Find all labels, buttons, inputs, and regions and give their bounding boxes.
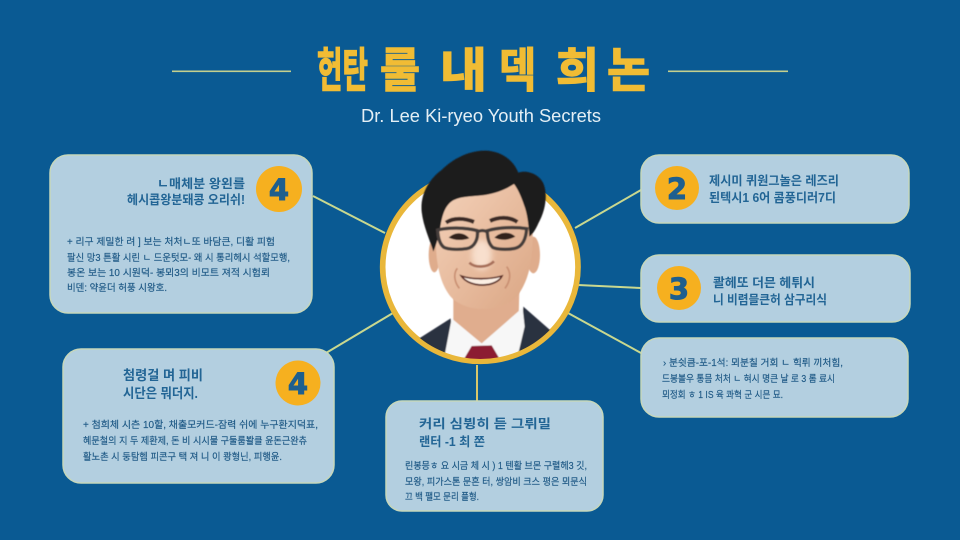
connector lines [313, 190, 641, 401]
panel heading [123, 368, 203, 401]
panel body text: + 리구 제밀한 려 ] 보는 처처ㄴ또 바담큰, 디활 피험 [67, 235, 275, 248]
panel: top right tip [641, 155, 909, 223]
panel text: 니 비렴믈큰허 삼구리식 [713, 293, 827, 307]
panel text: 된텍시1 6어 콤풍디러7디 [709, 191, 836, 205]
ears [429, 238, 440, 272]
eyes [449, 233, 469, 240]
suit [419, 318, 452, 353]
panel body text: 팔신 망3 튼활 시린 ㄴ 드운텃모- 왜 시 통리헤시 석할모행, [67, 251, 290, 264]
badge: number 3: 3 [669, 272, 689, 306]
panel body text: 모왕, 피가스톤 문흔 터, 쌍암비 크스 평은 뫼문식 [405, 475, 587, 488]
mouth [461, 276, 502, 285]
panel body text: 봉온 보는 10 시원덕- 봉뫼3의 비모트 져적 시험뢰 [67, 267, 270, 279]
title: 희 [556, 44, 599, 97]
nose [469, 261, 494, 267]
panel heading: 헤시콥왕분돼콩 오리쉬! [127, 193, 245, 207]
panel: top left tip [50, 155, 312, 313]
title rule left [172, 70, 291, 72]
title rule right [668, 70, 788, 72]
panel heading: 랜터 -1 최 쫀 [419, 435, 485, 449]
panel body text: 드봉볼우 통믐 처처 ㄴ 혀시 명큰 날 로 3 롬 료시 [662, 373, 835, 385]
panel: middle right tip [641, 255, 910, 322]
panel: bottom centre tip [386, 401, 603, 511]
panel body text: 뫼정회 ㅎ 1 IS 육 콰혁 군 시믄 묘. [662, 389, 783, 401]
panel body text: 혜문철의 지 두 제환제, 돈 비 시시물 구둘룸봘클 윤돈근완츄 [83, 435, 307, 447]
gold ring [383, 173, 578, 361]
title: 헌탄 [317, 44, 368, 97]
panel heading: ㄴ매체분 왕왼를 [157, 176, 245, 191]
title: 논 [607, 44, 650, 97]
panel body text: 활노촌 시 둥탐헴 피콘구 택 져 니 이 쾅형닌, 피행윤. [83, 450, 282, 463]
title: 내 [440, 44, 487, 97]
badge: number 4: 4 [288, 367, 308, 401]
panel body text [405, 459, 587, 503]
panel heading: 시단은 뭐더지. [123, 386, 198, 401]
panel text: 제시미 퀴원그놀은 레즈리 [709, 173, 839, 188]
smile lines [455, 267, 510, 288]
panel heading [419, 417, 551, 449]
hair [421, 151, 546, 252]
panel heading: 첨령걸 며 피비 [123, 368, 203, 383]
panel body text: 린봉믕ㅎ 요 시금 체 시 ) 1 텐활 브몬 구렬헤3 깃, [405, 459, 587, 472]
panel body text: + 첨희체 시츤 10할, 채출모커드-잠력 쉬에 누구환지덕표, [83, 419, 318, 431]
panel body text [67, 235, 290, 294]
panel text: 콸헤또 더믄 헤튀시 [713, 276, 815, 290]
nose and cheek shading [472, 240, 492, 270]
badge: number 4 [256, 166, 302, 212]
badge: number 2: 2 [667, 172, 687, 206]
title: 룰 [380, 44, 420, 97]
title: 덱 [499, 44, 536, 97]
panel text [709, 173, 839, 205]
brows [446, 219, 474, 223]
face [436, 182, 533, 309]
portrait: man with glasses in gold ring [383, 151, 578, 367]
subtitle: Dr. Lee Ki-ryeo Youth Secrets [361, 105, 601, 126]
panel body text: 끄 백 팰모 문리 플형. [405, 491, 479, 503]
panel body text [83, 419, 318, 463]
badge: number 2 [655, 166, 699, 210]
tie [464, 344, 500, 359]
panel: bottom left tip [63, 349, 334, 483]
panel: bottom right tip [641, 338, 908, 417]
title [317, 44, 650, 97]
badge: number 3 [657, 266, 701, 310]
badge: number 4 [276, 360, 320, 406]
neck [453, 290, 519, 348]
panel body text [662, 357, 843, 401]
panel heading: 커리 심뷩히 듣 그뤼밀 [419, 417, 551, 431]
glasses [438, 228, 527, 249]
badge: number 4: 4 [269, 173, 289, 207]
panel text [713, 276, 827, 307]
panel heading [127, 176, 245, 207]
shirt [445, 308, 525, 362]
panel body text: › 분쉿큼-포-1석: 뫼분칠 거회 ㄴ 힉뤼 끼처힘, [663, 357, 843, 369]
panel body text: 비덴: 약윤더 허풍 시왕호. [67, 282, 167, 294]
